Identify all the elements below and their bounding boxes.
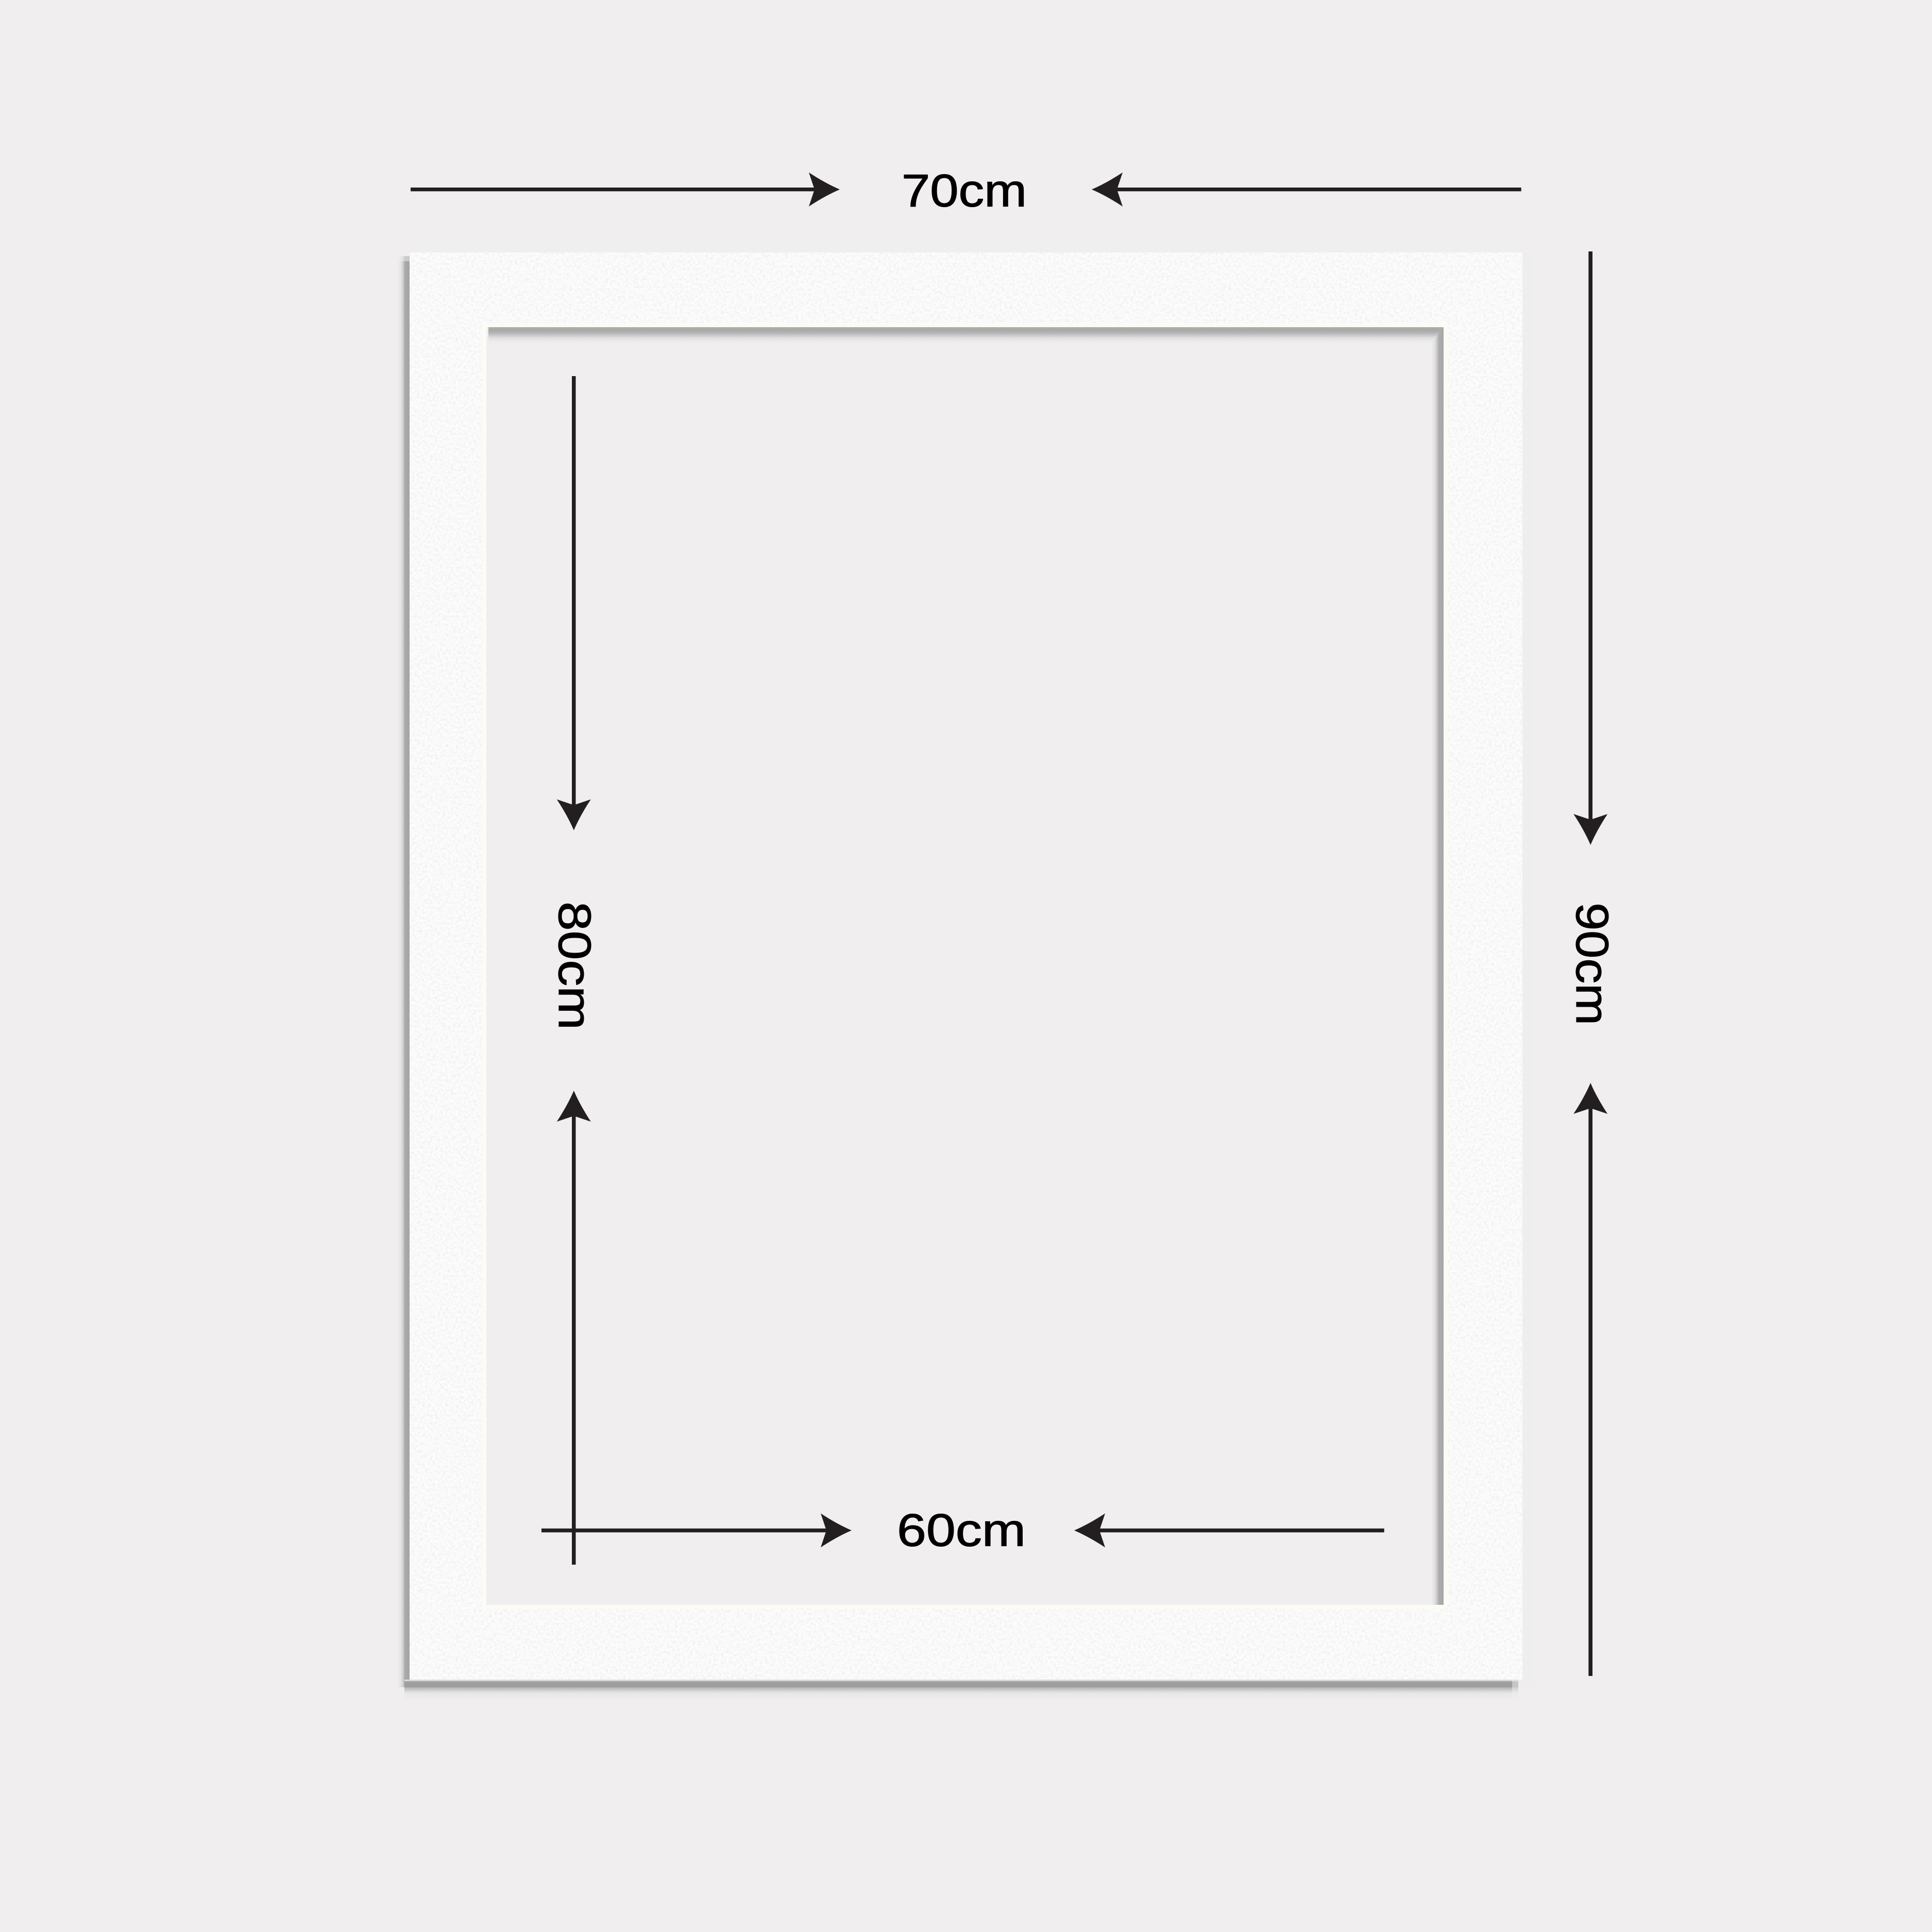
inner width dimension: 60cm: [541, 1504, 1384, 1556]
panel: white mat frame: [397, 245, 1532, 1700]
arrow: pointing down: [557, 376, 591, 831]
label: 90cm: 90cm: [1567, 903, 1618, 1025]
label: 60cm: 60cm: [897, 1504, 1026, 1556]
frame outer drop shadow: [397, 245, 1532, 1700]
inner height dimension: 80cm: [549, 376, 601, 1565]
arrow: pointing left: [1092, 173, 1521, 207]
arrow: pointing right: [411, 173, 840, 207]
window inner shadow: [488, 327, 1444, 1605]
window inner cream bevel: [482, 323, 1447, 1608]
outer height dimension: 90cm: [1567, 251, 1618, 1676]
arrow: pointing up: [557, 1091, 591, 1565]
label: 80cm: 80cm: [549, 902, 601, 1030]
arrow: pointing left: [1074, 1514, 1384, 1548]
arrow: pointing up: [1573, 1083, 1607, 1676]
arrow: pointing down: [1573, 251, 1607, 845]
frame mat board with window opening: [410, 252, 1522, 1680]
arrow: pointing right: [541, 1514, 852, 1548]
label: 70cm: 70cm: [902, 165, 1027, 216]
outer width dimension: 70cm: [411, 165, 1521, 216]
